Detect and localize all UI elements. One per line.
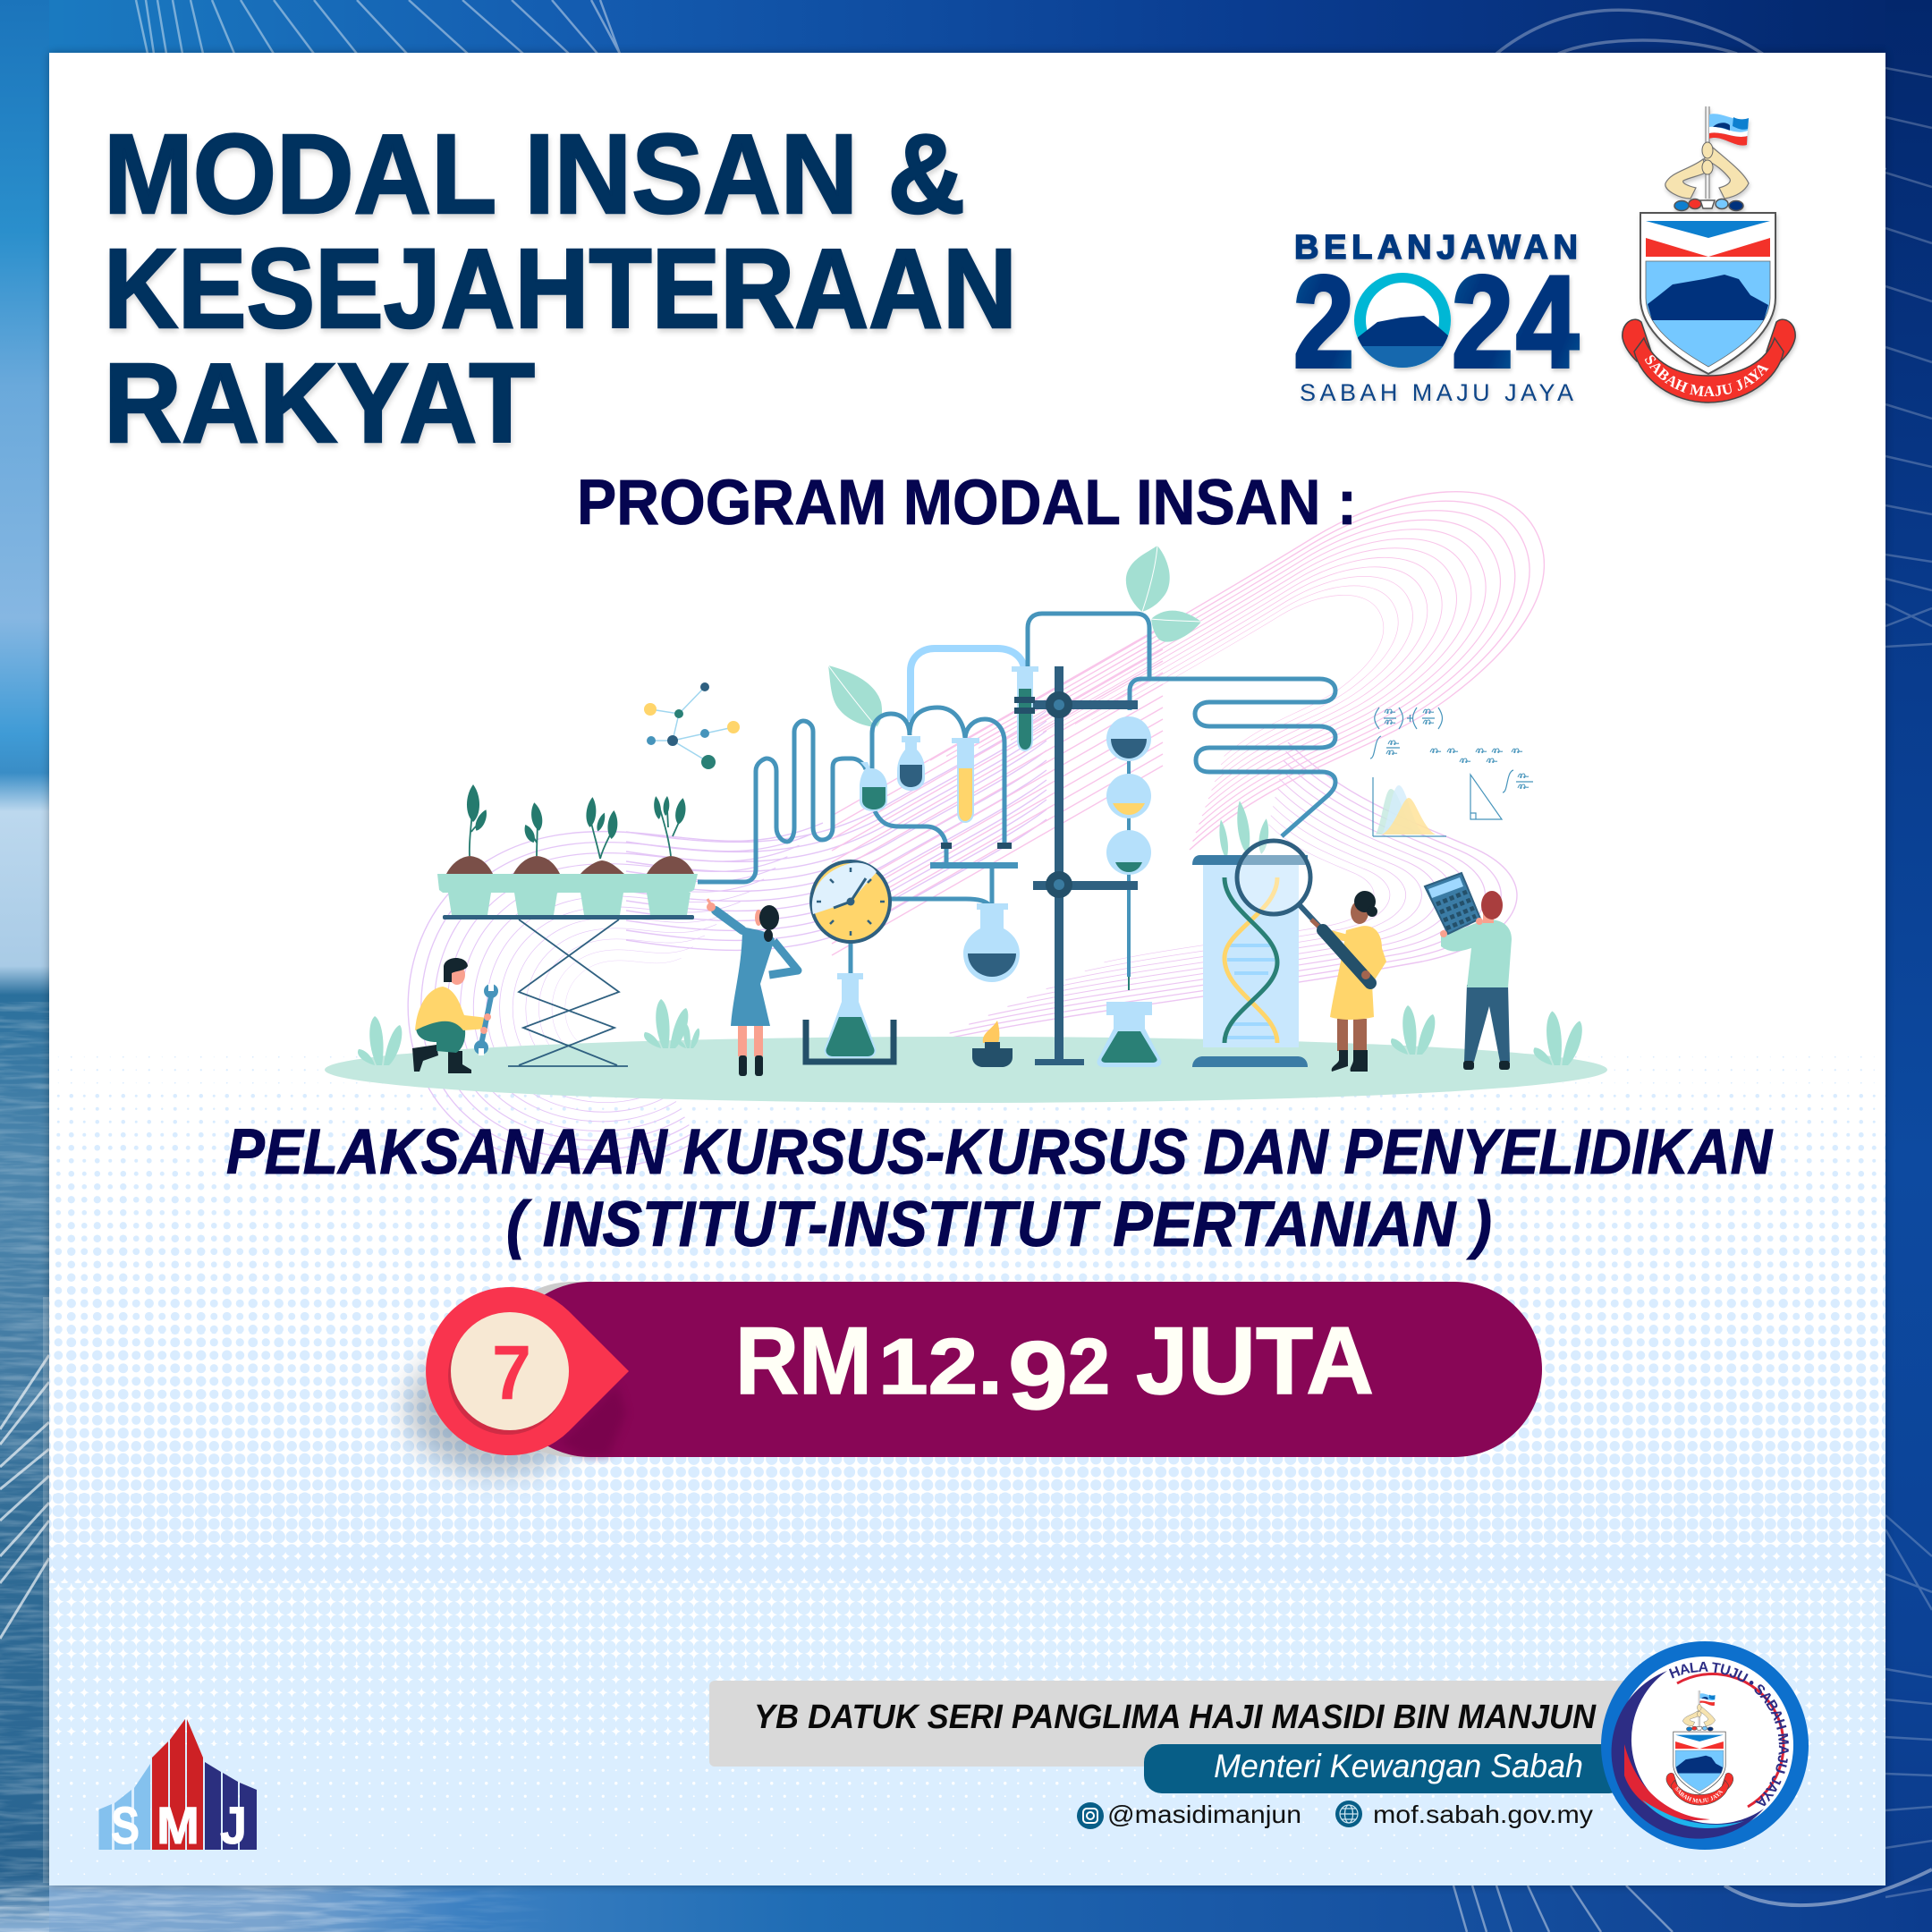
description text: PELAKSANAAN KURSUS-KURSUS DAN PENYELIDIKAN [226, 1117, 1774, 1188]
person: crouching man with wrench [412, 958, 498, 1073]
round badge: HALA TUJU • SABAH MAJU JAYA [1669, 1662, 1789, 1807]
logo: SMJ: M [157, 1797, 199, 1855]
social links: @masidimanjun [1107, 1801, 1301, 1828]
logo: SMJ: S [111, 1797, 140, 1855]
amount [735, 1307, 1374, 1429]
DNA column [1192, 800, 1308, 1067]
leaves [828, 546, 1201, 727]
plant table with seedlings [437, 784, 698, 1066]
minister title bar [1144, 1744, 1627, 1793]
logo year: 2024: 2 [1452, 249, 1513, 394]
number pin: 7 [492, 1330, 531, 1416]
logo tagline: SABAH MAJU JAYA [1300, 379, 1573, 406]
gauge clock [811, 861, 890, 942]
description text: ( INSTITUT-INSTITUT PERTANIAN ) [506, 1190, 1492, 1260]
logo heading: Belanjawan: BELANJAWAN [1294, 229, 1578, 267]
molecule [644, 682, 740, 769]
social links: mof.sabah.gov.my [1373, 1801, 1593, 1828]
coat of arms of Sabah [1623, 106, 1795, 402]
title [104, 111, 1017, 466]
minister title bar: Menteri Kewangan Sabah [1214, 1748, 1583, 1784]
plants on ground [358, 999, 1582, 1065]
logo year: 2024 [1295, 273, 1582, 373]
logo year: 2024: 2 [1293, 249, 1354, 394]
round badge [1601, 1641, 1809, 1850]
amount: 9 [1008, 1321, 1068, 1429]
allocation pill [407, 1282, 1542, 1473]
amount: JUTA [1136, 1307, 1374, 1414]
icon: instagram [1077, 1802, 1104, 1829]
title: KESEJAHTERAAN [104, 225, 1017, 352]
title: MODAL INSAN & [104, 111, 965, 237]
illustration: laboratory and agriculture scene [325, 492, 1607, 1169]
logo: SMJ [98, 1719, 257, 1855]
amount: RM [735, 1307, 872, 1414]
amount: 2 [1068, 1322, 1110, 1411]
minister name bar: YB DATUK SERI PANGLIMA HAJI MASIDI BIN MANJUN [754, 1699, 1597, 1736]
icon: globe [1335, 1801, 1362, 1827]
social links [1077, 1801, 1593, 1829]
person: man with calculator [1425, 873, 1512, 1070]
magnifying glass [1237, 841, 1323, 930]
logo: SMJ: J [220, 1797, 247, 1855]
ground [325, 1037, 1607, 1103]
burner [972, 1021, 1013, 1067]
math formulas and small chart [1370, 708, 1533, 836]
number pin [426, 1287, 629, 1455]
mini coat of arms [1666, 1690, 1733, 1805]
description text [226, 1117, 1774, 1260]
lab glassware and piping [698, 614, 1335, 1067]
minister name bar [709, 1681, 1640, 1767]
person: woman in yellow dress with magnifier [1311, 891, 1386, 1072]
retort stand [1014, 666, 1138, 1065]
person: woman in blue dress pointing [707, 899, 798, 1076]
decorative line waves [408, 492, 1544, 1169]
logo year: 2024: 4 [1516, 249, 1579, 394]
flasks and test tubes [825, 666, 1162, 1067]
logo: Belanjawan 2024 [1293, 229, 1579, 406]
amount: 12. [878, 1322, 1003, 1411]
subheading: program: PROGRAM MODAL INSAN : [577, 468, 1357, 538]
title: RAKYAT [104, 340, 535, 466]
